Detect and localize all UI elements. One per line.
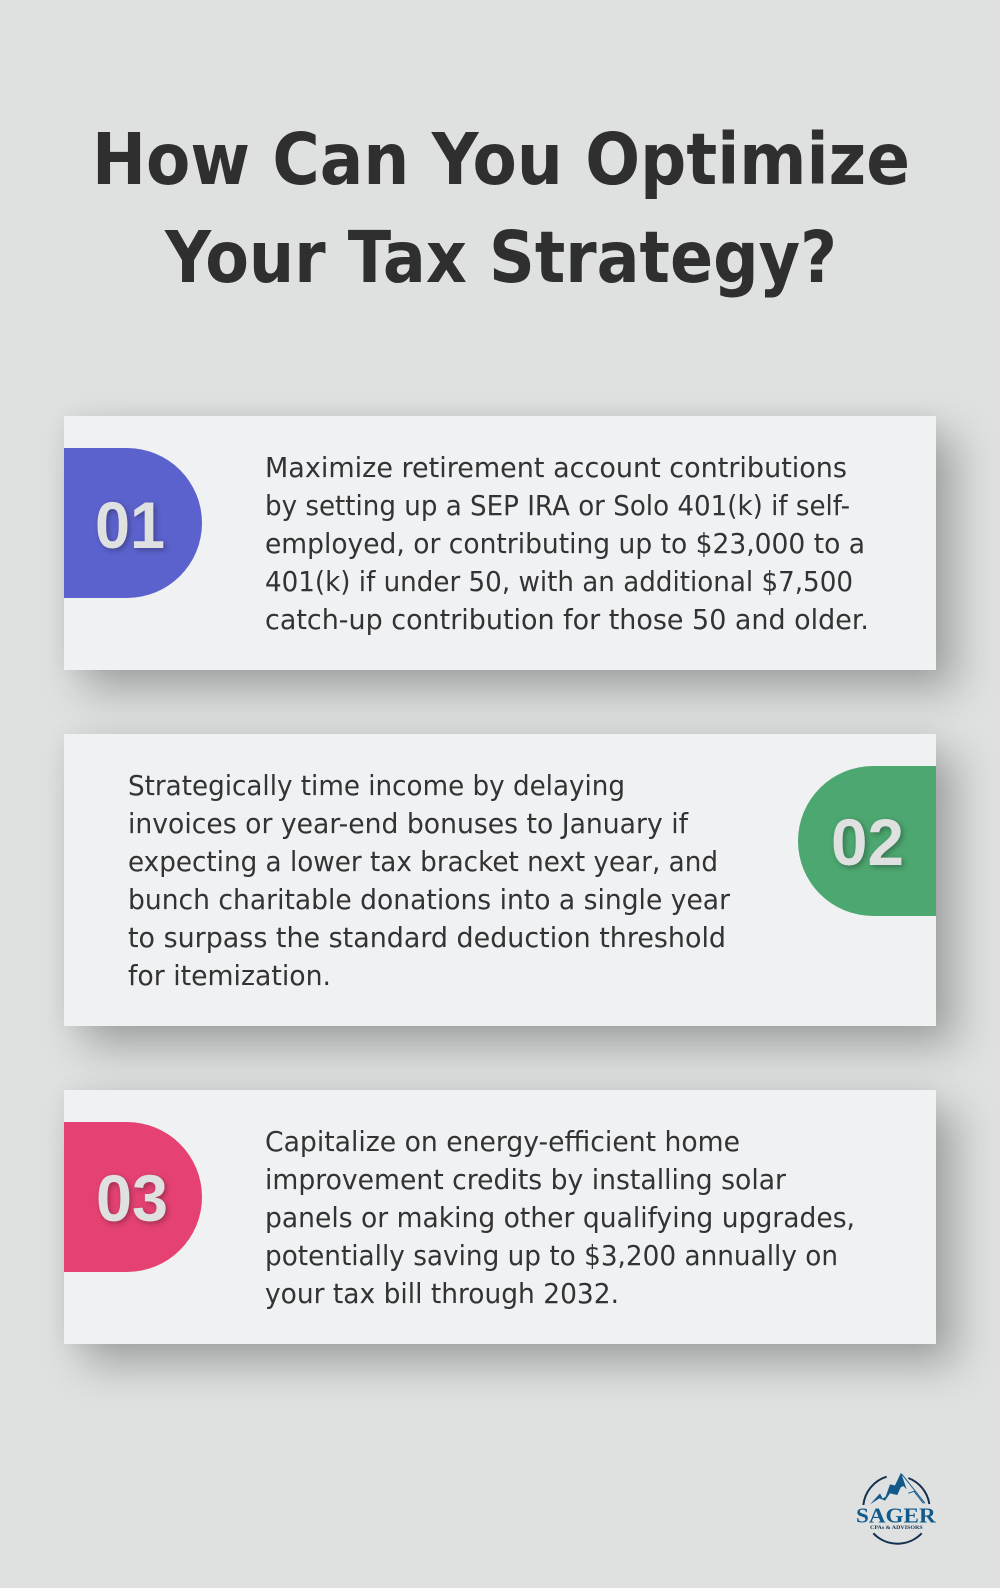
text: step 02: Strategically time income by delaying: [128, 770, 625, 802]
text: step 03: panels or making other qualifying upgrades,: [265, 1202, 855, 1234]
text: step 01: by setting up a SEP IRA or Solo 401(k) if self-: [265, 490, 850, 522]
panel: step 01: [64, 416, 936, 670]
badge: 03: 03: [96, 1161, 168, 1235]
text: step 02: [128, 770, 731, 992]
badge: 02: [798, 766, 936, 916]
text: step 03: improvement credits by installing solar: [265, 1164, 787, 1196]
title: Your Tax Strategy?: [164, 216, 837, 299]
panel: step 02: [64, 734, 936, 1026]
badge: 01: [64, 448, 202, 598]
logo: Sager CPAs & Advisors: [856, 1472, 936, 1545]
text: step 01: [265, 452, 869, 636]
logo: Sager CPAs & Advisors: CPAs & ADVISORS: [870, 1526, 923, 1531]
text: step 02: bunch charitable donations into a single year: [128, 884, 731, 916]
text: step 03: Capitalize on energy-efficient home: [265, 1126, 740, 1158]
text: step 01: 401(k) if under 50, with an additional $7,500: [265, 566, 853, 598]
text: step 02: expecting a lower tax bracket next year, and: [128, 846, 718, 878]
text: step 01: Maximize retirement account contributions: [265, 452, 847, 484]
text: step 03: potentially saving up to $3,200 annually on: [265, 1240, 838, 1272]
panel: step 03: [64, 1090, 936, 1344]
title: How Can You Optimize: [92, 118, 910, 201]
logo: Sager CPAs & Advisors: SAGER: [856, 1503, 936, 1527]
text: step 03: [265, 1126, 855, 1310]
text: step 02: to surpass the standard deduction threshold: [128, 922, 726, 954]
text: step 02: for itemization.: [128, 960, 331, 992]
text: step 02: invoices or year-end bonuses to January if: [128, 808, 689, 840]
title: [92, 118, 910, 299]
badge: 02: 02: [831, 805, 904, 879]
badge: 01: 01: [95, 488, 165, 562]
text: step 01: employed, or contributing up to $23,000 to a: [265, 528, 865, 560]
text: step 03: your tax bill through 2032.: [265, 1278, 619, 1310]
text: step 01: catch-up contribution for those 50 and older.: [265, 604, 869, 636]
badge: 03: [64, 1122, 202, 1272]
